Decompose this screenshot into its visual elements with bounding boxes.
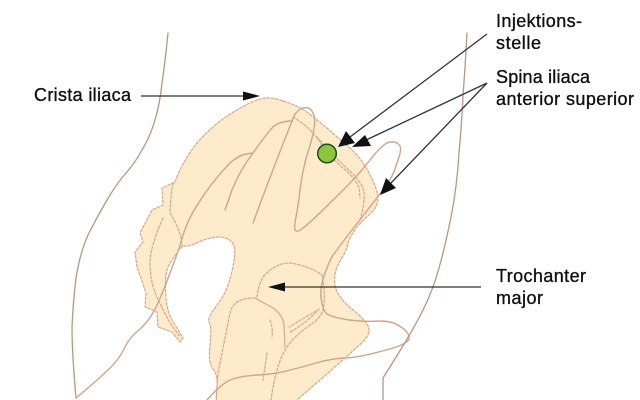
label: Injektionsstelle (496, 11, 582, 53)
arrow: Spina iliaca to crest (352, 83, 487, 147)
lower left skin line and hip folds (76, 121, 292, 398)
inner dashed bone contours (150, 117, 364, 400)
label: Trochanter major: major (496, 288, 543, 308)
label: Trochanter major (496, 266, 586, 308)
right body contour (383, 33, 467, 400)
arrow: Trochanter major (268, 282, 481, 292)
pelvic bone with femur (135, 98, 378, 400)
arrow: Spina iliaca to bone edge (380, 83, 487, 195)
label: Injektionsstelle: Injektions- (496, 11, 582, 31)
fold branch (225, 153, 253, 210)
femur neck line (255, 298, 285, 347)
left body contour (72, 33, 168, 398)
label: Spina iliaca anterior superior: anterior superior (496, 89, 634, 109)
label: Injektionsstelle: stelle (496, 33, 541, 53)
arrow: Injektionsstelle (338, 34, 487, 147)
label: Trochanter major: Trochanter (496, 266, 586, 286)
arrow: Crista iliaca (141, 92, 260, 100)
injection site marker (318, 144, 336, 163)
label: Spina iliaca anterior superior: Spina iliaca (496, 67, 591, 87)
label: Spina iliaca anterior superior (496, 67, 634, 109)
label: Crista iliaca: Crista iliaca (34, 85, 132, 105)
long hip fold line (207, 108, 409, 400)
